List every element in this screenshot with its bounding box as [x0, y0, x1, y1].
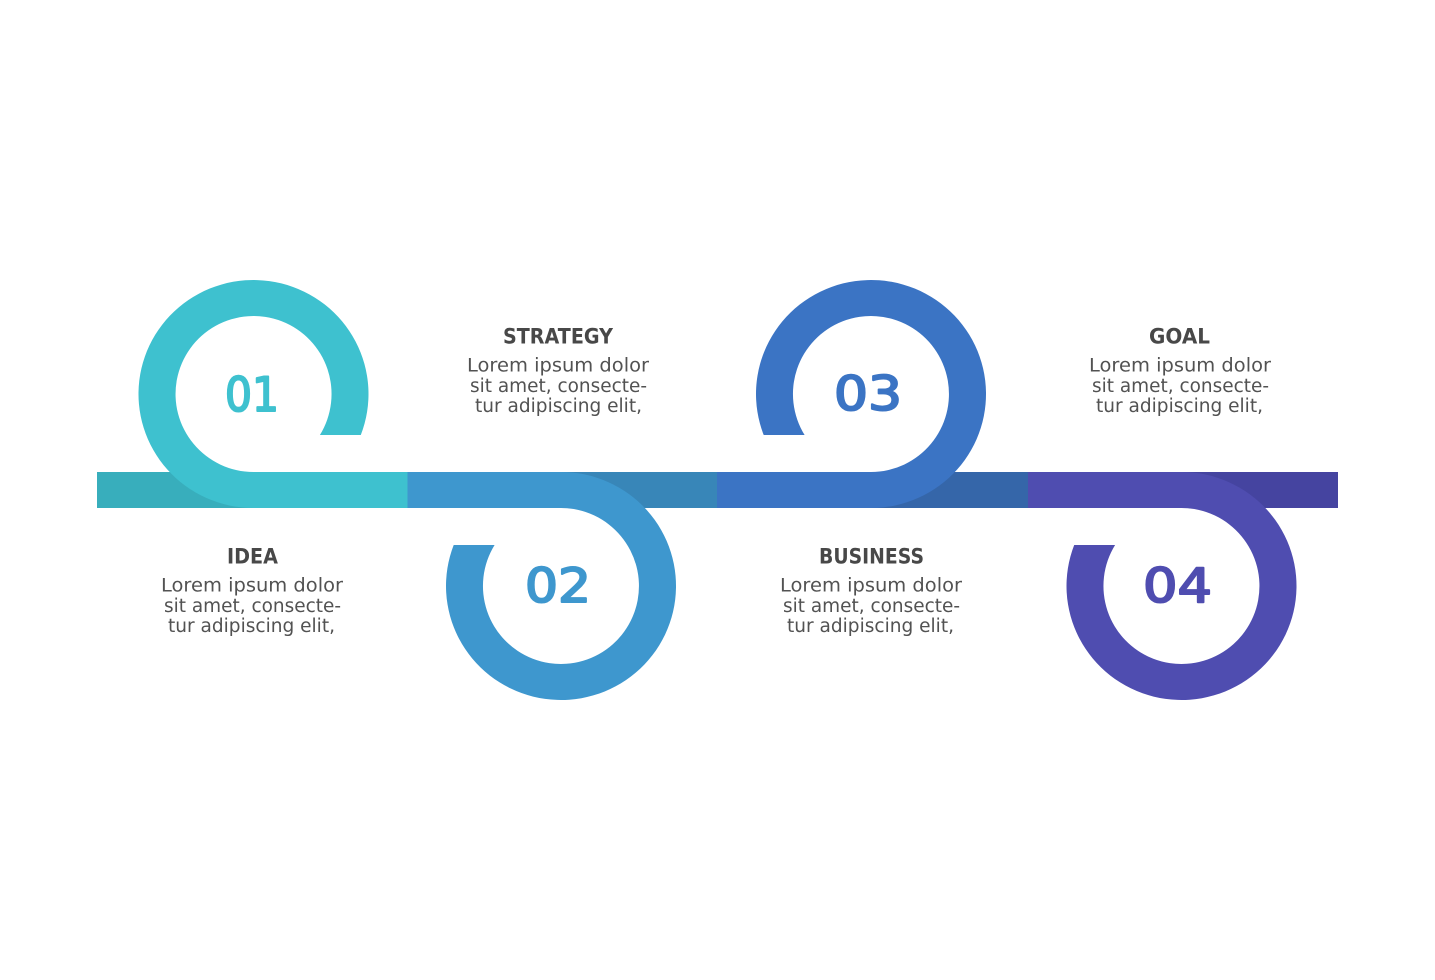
text block: idea	[161, 544, 343, 637]
body: idea: Lorem ipsum dolor	[161, 576, 343, 596]
number 02: 02	[525, 559, 591, 614]
step 02: blue loop	[408, 472, 676, 700]
heading: business: BUSINESS	[819, 544, 924, 570]
body: goal: tur adipiscing elit,	[1096, 396, 1263, 417]
body: goal: sit amet, consecte-	[1092, 376, 1269, 397]
text block: business	[780, 544, 962, 637]
body: business	[780, 576, 962, 637]
timeline bar: darker base segments	[97, 472, 1338, 508]
body: goal	[1089, 356, 1271, 417]
number 03: 03	[834, 367, 902, 422]
heading: strategy: STRATEGY	[503, 324, 613, 350]
body: idea	[161, 576, 343, 637]
body: idea: tur adipiscing elit,	[168, 616, 335, 637]
number 04: 04	[1143, 559, 1212, 614]
step 03: royal blue loop	[717, 280, 986, 508]
step 04: indigo loop	[1028, 472, 1297, 700]
body: business: sit amet, consecte-	[783, 596, 960, 617]
body: strategy: tur adipiscing elit,	[475, 396, 642, 417]
body: business: tur adipiscing elit,	[787, 616, 954, 637]
text block: goal	[1089, 324, 1271, 417]
body: strategy	[467, 356, 649, 417]
heading: idea: IDEA	[227, 544, 278, 570]
heading: goal: GOAL	[1149, 324, 1210, 350]
number 01: 01	[225, 368, 279, 423]
body: idea: sit amet, consecte-	[164, 596, 341, 617]
body: strategy: sit amet, consecte-	[470, 376, 647, 397]
step 01: teal loop	[138, 280, 408, 508]
body: business: Lorem ipsum dolor	[780, 576, 962, 596]
body: strategy: Lorem ipsum dolor	[467, 356, 649, 376]
text block: strategy	[467, 324, 649, 417]
body: goal: Lorem ipsum dolor	[1089, 356, 1271, 376]
